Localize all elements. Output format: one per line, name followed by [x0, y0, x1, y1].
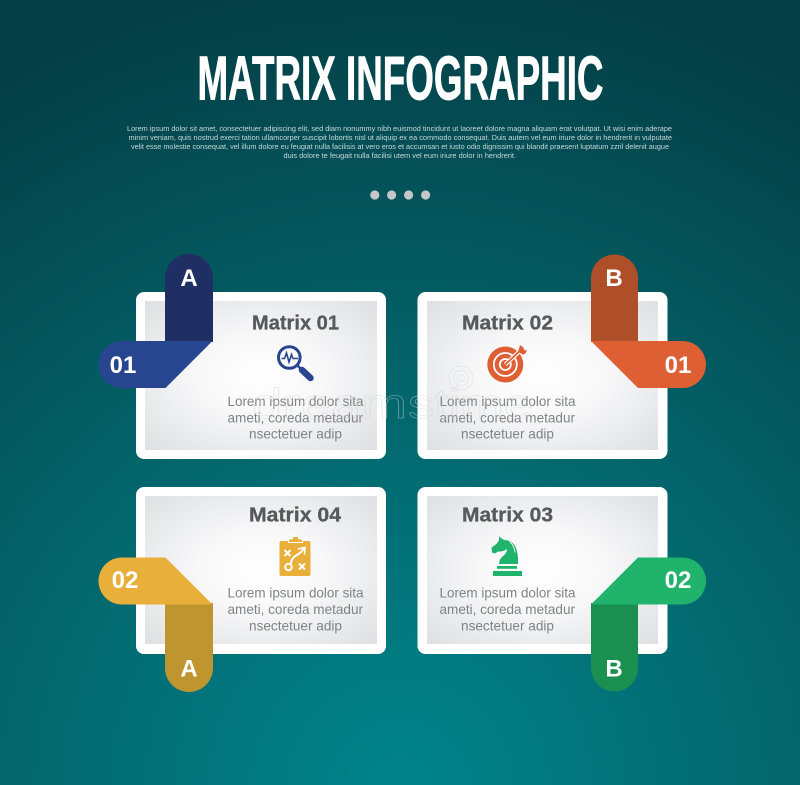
text: matrix 03 body: Lorem ipsum dolor sita — [440, 584, 576, 600]
text: matrix 02 body — [440, 393, 576, 442]
card inner 01 — [145, 301, 377, 450]
text: matrix 04 body — [228, 584, 364, 634]
text: matrix 02 body: nsectetuer adip — [461, 426, 554, 442]
ribbon: A / 02 yellow — [98, 558, 213, 692]
icon: magnifier with pulse — [278, 347, 310, 378]
icon: strategy clipboard — [280, 536, 310, 576]
ribbon 01 right — [591, 341, 706, 388]
intro paragraph: Lorem ipsum dolor sit amet, consectetuer adipiscing elit, sed diam nonummy nibh euismod tincidunt ut laoreet dolore magna aliquam erat volutpat. Ut wisi enim aderape — [127, 126, 672, 133]
text: matrix 01 body: ameti, coreda metadur — [228, 410, 363, 426]
panel: matrix 03 — [418, 487, 668, 654]
intro paragraph: duis dolore te feugait nulla facilisi utem vel eum iriure dolor in hendrerit. — [284, 153, 516, 160]
card frame 04 — [136, 487, 386, 654]
icon: chess knight — [492, 536, 522, 576]
heading: matrix 02: Matrix 02 — [462, 312, 553, 334]
intro paragraph — [127, 126, 672, 160]
panel: matrix 01 — [136, 292, 386, 459]
text: matrix 04 body: ameti, coreda metadur — [228, 601, 363, 617]
ribbon: A / 01 navy — [99, 254, 213, 388]
text: matrix 03 body: nsectetuer adip — [461, 618, 554, 634]
text: matrix 03 body: ameti, coreda metadur — [440, 601, 575, 617]
card inner 03 — [427, 496, 658, 644]
label 02: 02 — [112, 567, 138, 594]
watermark — [252, 366, 533, 427]
label 02 right: 02 — [665, 567, 691, 594]
ribbon 02 right — [591, 558, 706, 604]
ribbon: B / 02 green — [591, 558, 706, 692]
label A: A — [180, 265, 198, 292]
intro paragraph: minim veniam, quis nostrud exerci tation ullamcorper suscipit lobortis nisl ut aliquip ex ea commodo consequat. Duis autem vel eum iriure dolor in hendrerit in vulputate — [128, 135, 672, 142]
panel: matrix 04 — [136, 487, 386, 654]
tab B — [591, 254, 638, 342]
text: matrix 01 body — [228, 393, 364, 442]
text: matrix 01 body: nsectetuer adip — [249, 426, 342, 442]
panel: matrix 02 — [418, 292, 668, 459]
watermark: dream — [252, 380, 407, 427]
tab A — [165, 254, 213, 342]
label B bottom: B — [605, 656, 623, 682]
card frame 03 — [418, 487, 668, 654]
tab B bottom — [591, 603, 638, 692]
pagination dots — [370, 190, 430, 200]
text: matrix 01 body: Lorem ipsum dolor sita — [228, 393, 364, 409]
tab A bottom — [165, 603, 213, 692]
card inner 02 — [427, 301, 658, 450]
ribbon: B / 01 orange — [591, 254, 706, 388]
text: matrix 02 body: Lorem ipsum dolor sita — [440, 393, 576, 409]
text: matrix 04 body: nsectetuer adip — [249, 618, 342, 634]
ribbon 02 — [98, 558, 212, 604]
card frame 02 — [418, 292, 668, 459]
watermark: stime — [408, 380, 533, 427]
heading: matrix 03: Matrix 03 — [462, 504, 553, 526]
text: matrix 02 body: ameti, coreda metadur — [440, 410, 575, 426]
ribbon 01 — [99, 341, 212, 388]
label 01 right: 01 — [665, 352, 691, 379]
card frame 01 — [136, 292, 386, 459]
text: matrix 03 body — [440, 584, 576, 634]
label A bottom: A — [180, 656, 198, 682]
icon: target with arrow — [487, 345, 527, 382]
heading: matrix 01: Matrix 01 — [252, 312, 339, 334]
intro paragraph: velit esse molestie consequat, vel illum dolore eu feugiat nulla facilisis at vero eros et accumsan et iusto odio dignissim qui blandit praesent luptatum zzril delenit augue — [131, 144, 669, 151]
card inner 04 — [145, 496, 377, 644]
heading: matrix 04: Matrix 04 — [249, 504, 342, 526]
label B: B — [605, 265, 623, 292]
label 01: 01 — [110, 352, 136, 379]
text: matrix 04 body: Lorem ipsum dolor sita — [228, 584, 364, 600]
